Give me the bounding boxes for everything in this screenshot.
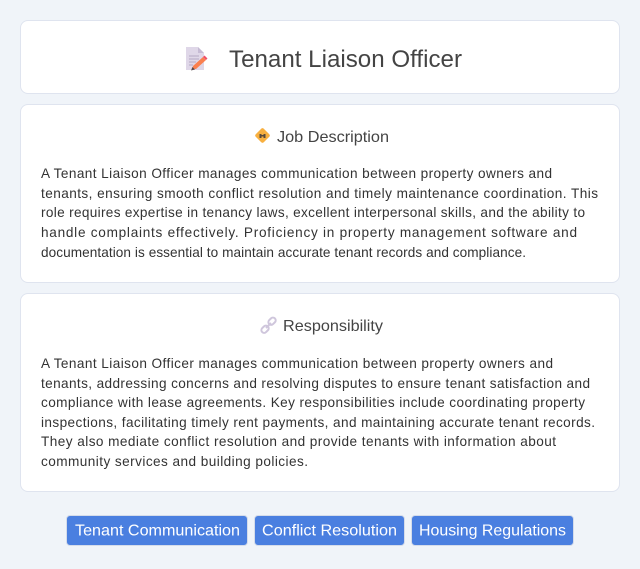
panel: responsibility xyxy=(20,293,620,492)
text block: job description: handle complaints effectively. Proficiency in property management software and xyxy=(41,225,577,240)
text block: responsibility: A Tenant Liaison Officer manages communication between property owners and xyxy=(41,356,553,371)
text block: job description: tenants, ensuring smooth conflict resolution and timely maintenance coordination. This xyxy=(41,186,598,201)
heading: job description: Job Description xyxy=(277,129,389,146)
title: Tenant Liaison Officer xyxy=(229,46,462,73)
text block: responsibility: They also mediate conflict resolution and provide tenants with information about xyxy=(41,434,556,449)
text block: responsibility: inspections, facilitating timely rent payments, and maintaining accurate tenant records. xyxy=(41,415,595,430)
tag labels: Conflict Resolution xyxy=(262,522,397,540)
text block: job description: A Tenant Liaison Officer manages communication between property owners and xyxy=(41,166,552,181)
tag labels: Tenant Communication xyxy=(75,522,240,540)
text block: responsibility: tenants, addressing concerns and resolving disputes to ensure tenant satisfaction and xyxy=(41,376,590,391)
tag: conflict resolution xyxy=(254,515,405,546)
icon: chain link xyxy=(260,316,277,334)
tag labels: Housing Regulations xyxy=(419,522,566,540)
icon: diamond sign xyxy=(255,128,270,143)
text block: job description: role requires expertise in tenancy laws, excellent interpersonal skills, and the ability to xyxy=(41,205,585,220)
text block: job description xyxy=(41,166,598,260)
heading: responsibility: Responsibility xyxy=(283,318,383,335)
panel: title card xyxy=(20,20,620,94)
text block: responsibility: community services and building policies. xyxy=(41,454,308,469)
icon: memo with pencil xyxy=(186,47,208,70)
tag: tenant communication xyxy=(66,515,248,546)
text block: responsibility: compliance with lease agreements. Key responsibilities include coordinating property xyxy=(41,395,585,410)
text block: job description: documentation is essential to maintain accurate tenant records and compliance. xyxy=(41,245,526,260)
panel: job description xyxy=(20,104,620,283)
tag: housing regulations xyxy=(411,515,574,546)
